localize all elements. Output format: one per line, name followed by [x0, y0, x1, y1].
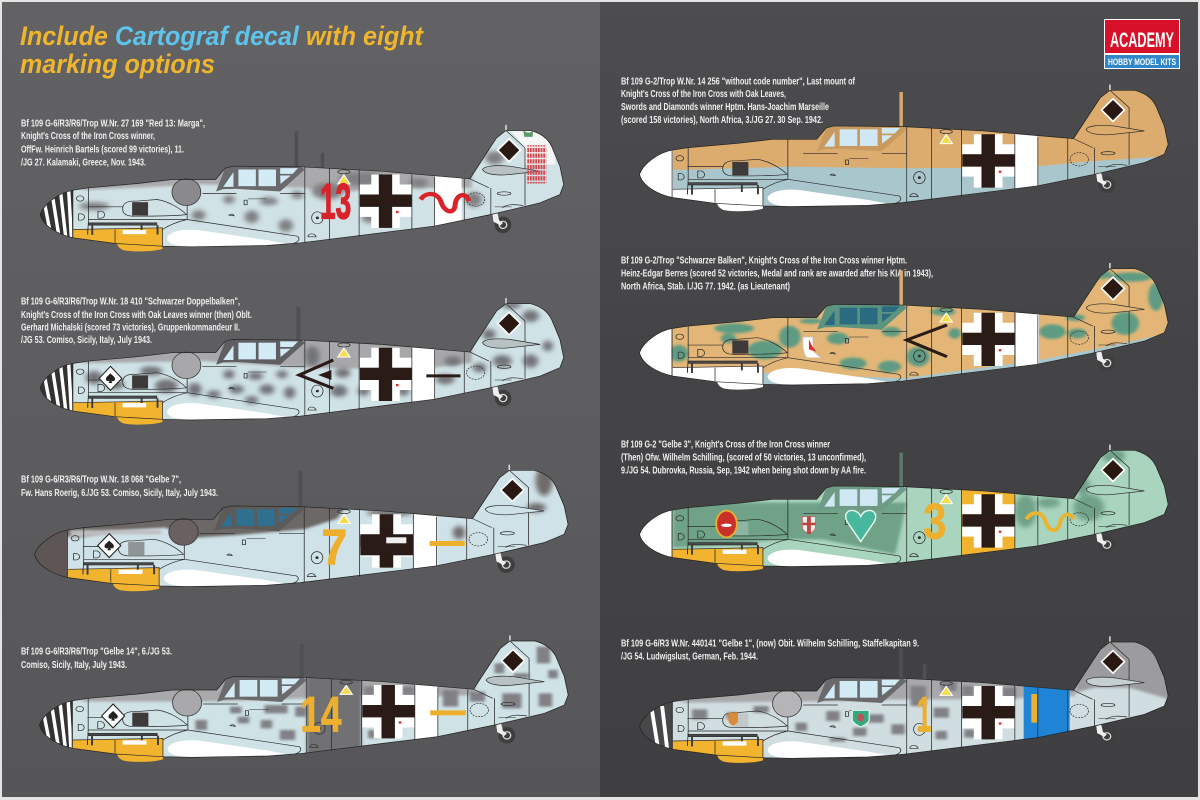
unit emblem [99, 366, 122, 390]
panel: option 2 Schwarzer Doppelbalken [21, 296, 564, 426]
caption: Red 13: OffFw. Heinrich Bartels (scored 99 victories), 11. [21, 144, 184, 156]
caption: Marseille: (scored 158 victories), North Africa, 3./JG 27. 30 Sep. 1942. [621, 114, 823, 126]
aircraft profile: Red 13 [39, 125, 564, 253]
caption: Gelbe 7 [21, 474, 218, 499]
yellow bar [430, 710, 466, 715]
caption: Red 13: Bf 109 G-6/R3/R6/Trop W.Nr. 27 169 "Red 13: Marga", [21, 118, 205, 130]
unit emblem [98, 534, 121, 558]
code number 7: 7 [322, 520, 347, 575]
crest emblem [728, 713, 738, 726]
caption: Gelbe 14: Comiso, Sicily, Italy, July 1943. [21, 659, 127, 671]
caption: Doppelbalken: Gerhard Michalski (scored 73 victories), Gruppenkommandeur II. [21, 322, 240, 334]
code number 3: 3 [923, 494, 946, 549]
rudder crest [523, 130, 533, 137]
aircraft profile: Marseille [638, 85, 1171, 213]
caption: Marseille: Knight's Cross of the Iron Cross with Oak Leaves, [621, 88, 786, 100]
red devil emblem [716, 511, 737, 537]
caption: Doppelbalken [21, 296, 252, 346]
caption: Doppelbalken: Bf 109 G-6/R3/R6/Trop W.Nr. 18 410 "Schwarzer Doppelbalken", [21, 296, 240, 308]
logo: Academy Hobby Model Kits [1104, 19, 1180, 69]
caption: Marseille [621, 76, 855, 126]
double chevron marking [299, 360, 333, 388]
caption: Doppelbalken: Knight's Cross of the Iron Cross with Oak Leaves winner (then) Oblt. [21, 309, 252, 321]
caption: Gelbe 1 [621, 638, 919, 662]
caption: Schwarzer Balken: Bf 109 G-2/Trop "Schwarzer Balken", Knight's Cross of the Iron Cross winner Hptm. [621, 254, 907, 266]
panel: option 3 Gelbe 7 [21, 465, 568, 593]
panel: option 5 Marseille [621, 76, 1171, 213]
caption: Schwarzer Balken [621, 254, 933, 292]
caption: Gelbe 3 [621, 438, 866, 476]
caption: Marseille: Swords and Diamonds winner Hptm. Hans-Joachim Marseille [621, 101, 829, 113]
caption: Schwarzer Balken: Heinz-Edgar Berres (scored 52 victories, Medal and rank are awarded after his KIA in 1943), [621, 268, 933, 280]
green shield emblem [852, 710, 869, 727]
caption: Gelbe 14: Bf 109 G-6/R3/R6/Trop "Gelbe 14", 6./JG 53. [21, 646, 172, 658]
title: marking options [20, 49, 215, 79]
caption: Schwarzer Balken: North Africa, Stab. I./JG 77. 1942. (as Lieutenant) [621, 280, 790, 292]
caption: Gelbe 1: /JG 54. Ludwigslust, German, Feb. 1944. [621, 650, 758, 662]
logo: Academy Hobby Model Kits: HOBBY MODEL KITS [1108, 57, 1176, 67]
title [20, 21, 424, 79]
group bar: red snake [421, 194, 469, 211]
caption: Marseille: Bf 109 G-2/Trop W.Nr. 14 256 "without code number", Last mount of [621, 76, 855, 88]
caption: Gelbe 14 [21, 646, 172, 671]
black bar [426, 374, 460, 377]
aircraft profile: Doppelbalken [39, 298, 564, 426]
aircraft profile: Gelbe 1 [638, 636, 1175, 764]
caption: Gelbe 3: (Then) Ofw. Wilhelm Schilling, (scored of 50 victories, 13 unconfirmed), [621, 452, 866, 464]
caption: Gelbe 3: 9./JG 54. Dubrovka, Russia, Sep, 1942 when being shot down by AA fire. [621, 464, 866, 476]
green heart emblem [846, 510, 876, 542]
aircraft profile: Schwarzer Balken [638, 263, 1171, 391]
caption: Doppelbalken: /JG 53. Comiso, Sicily, Italy, July 1943. [21, 334, 152, 346]
code number 14: 14 [300, 687, 342, 743]
caption: Gelbe 7: Fw. Hans Roerig, 6./JG 53. Comiso, Sicily, Italy, July 1943. [21, 487, 218, 499]
aircraft profile: Gelbe 14 [38, 635, 568, 763]
panel: option 7 Gelbe 3 [621, 438, 1168, 573]
chevron marking [907, 325, 947, 357]
aircraft profile: Gelbe 7 [33, 465, 568, 593]
unit emblem [102, 704, 125, 728]
panel: option 8 Gelbe 1 [621, 636, 1175, 764]
panel: option 4 Gelbe 14 [21, 635, 568, 763]
caption: Red 13 [21, 118, 205, 168]
caption: Gelbe 3: Bf 109 G-2 "Gelbe 3", Knight's Cross of the Iron Cross winner [621, 438, 830, 450]
aircraft profile: Gelbe 1: 1 [917, 687, 931, 743]
caption: Red 13: /JG 27. Kalamaki, Greece, Nov. 1943. [21, 156, 146, 168]
yellow bar [430, 541, 465, 546]
shield emblem [802, 517, 815, 534]
kill tally [527, 145, 546, 183]
caption: Red 13: Knight's Cross of the Iron Cross winner, [21, 130, 155, 142]
yellow snake [1026, 513, 1073, 530]
caption: Gelbe 1: Bf 109 G-6/R3 W.Nr. 440141 "Gelbe 1", (now) Obit. Wilhelm Schilling, Staffelkapitan 9. [621, 638, 919, 650]
red horse emblem [803, 337, 820, 358]
yellow bar on blue band [1031, 694, 1037, 723]
panel: option 1 Red 13 [21, 118, 564, 253]
title: Include Cartograf decal with eight [20, 21, 424, 51]
aircraft profile: Gelbe 3 [638, 445, 1168, 573]
aircraft profile: Red 13: 13 [320, 174, 351, 230]
panel: option 6 Schwarzer Balken [621, 254, 1171, 391]
caption: Gelbe 7: Bf 109 G-6/R3/R6/Trop W.Nr. 18 068 "Gelbe 7", [21, 474, 181, 486]
